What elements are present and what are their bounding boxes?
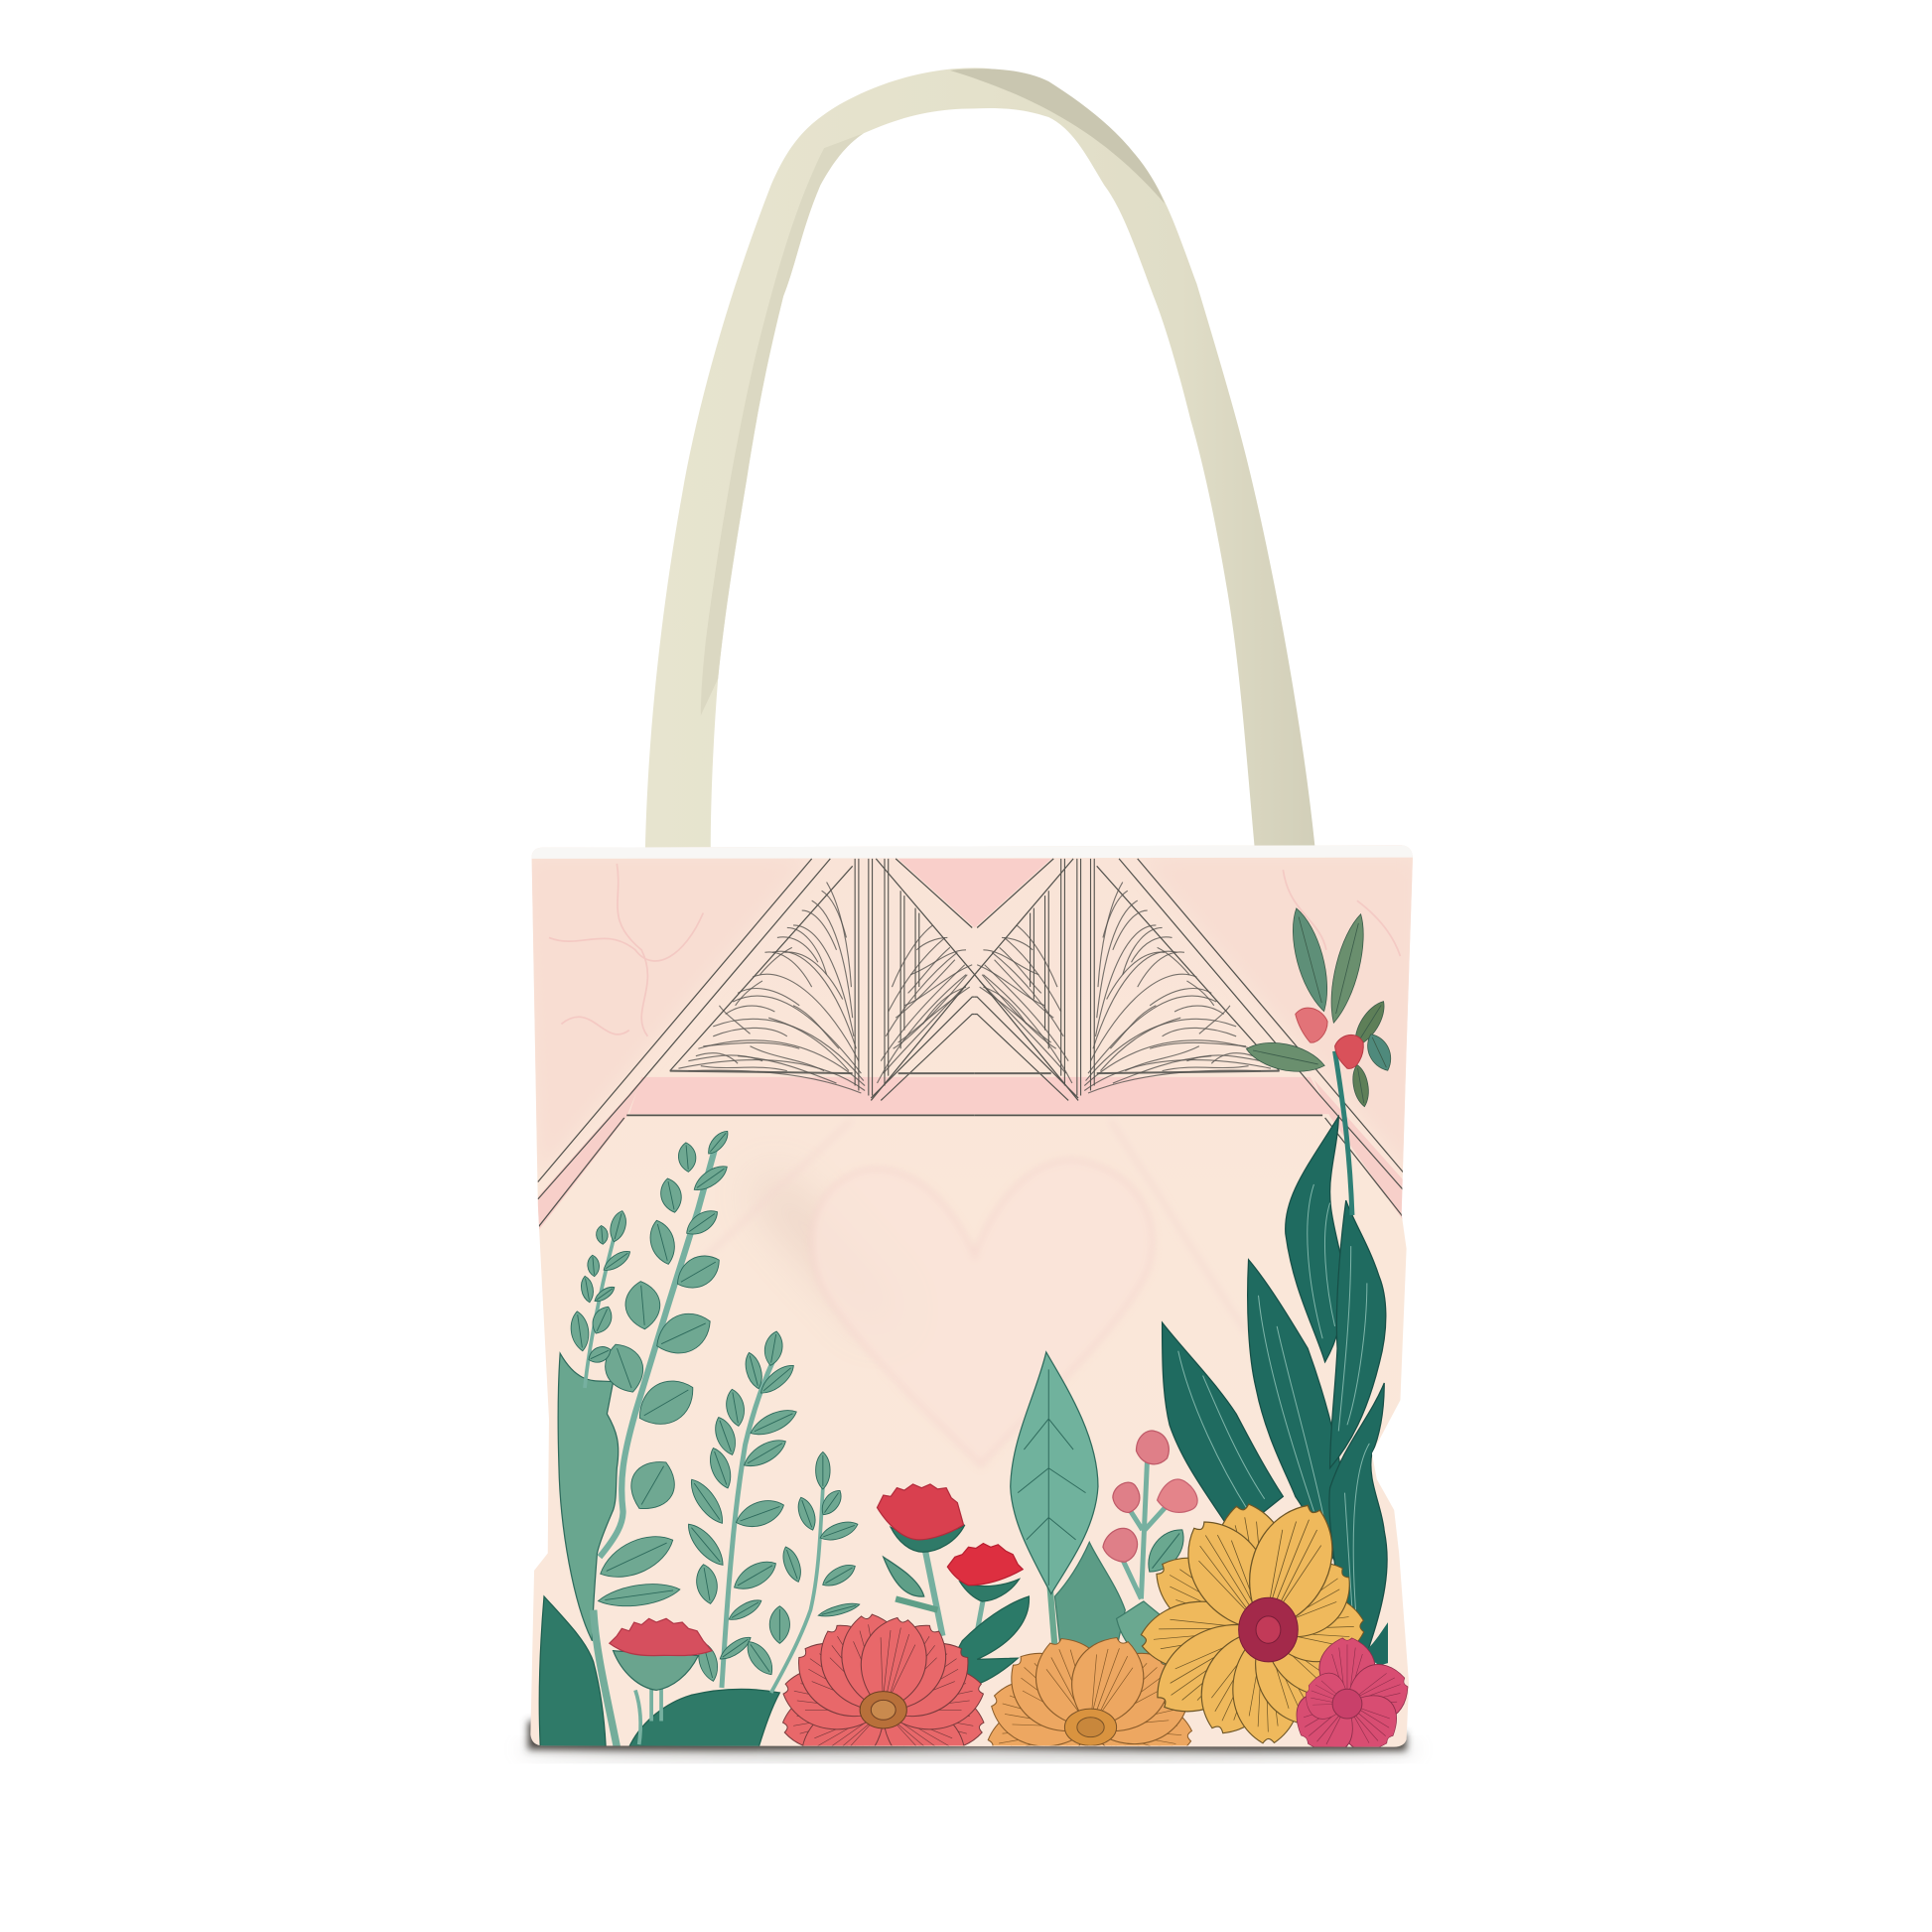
plant: stem left [594,1610,617,1747]
plant: dark leaf R3 [1286,1117,1344,1362]
plant: leaf highlights [1178,1184,1369,1628]
handle [645,68,1315,849]
handle: strap body [645,68,1315,849]
geometric design left half [538,859,1078,1227]
marble: top left corner tint [532,888,683,1146]
plant: dark leaf R1 [1163,1322,1283,1536]
pink diagonal band left [538,1079,641,1231]
plant: top right stem [1335,1051,1352,1215]
plant: mint blob leaf [1116,1600,1166,1664]
watermark heart [971,1246,984,1462]
pink triangle [898,859,1051,927]
plant: middle branch [682,1330,800,1688]
plant: eucalyptus branch [594,1128,732,1611]
plant: dark leaf R2 [1248,1260,1343,1567]
flower: red middle [878,1484,965,1636]
flower: large pink [778,1609,989,1801]
plant: dark leaf bottom left [539,1596,606,1747]
flower: pink right [1284,1638,1416,1764]
plant: dark leaf R5 [1329,1383,1387,1653]
bag shadow: bottom edge [528,1722,1407,1751]
bag shadow: soft halo [518,1740,1419,1758]
plant: big dark leaf bottom [629,1689,779,1747]
plant: small dark leaf [1368,1622,1388,1664]
bag artwork background [524,844,1419,1465]
plant: green leaf behind flowers [1054,1542,1125,1653]
watermark triangle lines [691,1120,1246,1332]
pink diagonal band right [1314,1080,1403,1219]
geometric design right half [871,859,1412,1227]
flower: red bottom-left [610,1618,712,1744]
illustration: floral tote bag [520,68,1414,1763]
plant: large mint leaf [1011,1352,1098,1647]
plant: dark leaves under red flower [952,1596,1029,1684]
handle: top right fold shade [950,69,1165,204]
plant: top right sprig [1244,905,1397,1108]
bag shadow [518,1722,1419,1758]
marble: faint veins [549,864,1400,1036]
plants and flowers [539,905,1416,1802]
plant: left tall leaf [558,1353,619,1641]
flower: red right [947,1544,1023,1638]
flower: yellow [1139,1493,1373,1745]
plant: dark leaf R4 [1330,1200,1386,1468]
pink band [629,1077,1330,1114]
fold: left crease [770,1193,812,1261]
top hem [530,844,1415,859]
flower: pink bud cluster [1103,1431,1197,1598]
plant: small left branch [569,1209,633,1388]
bag body [530,845,1413,1747]
marble: top right corner tint [1314,876,1412,1160]
fold shading [770,1193,812,1261]
flower: orange [984,1627,1196,1802]
handle: inner fold shade left [701,133,864,716]
plant: second middle branch [742,1451,861,1693]
